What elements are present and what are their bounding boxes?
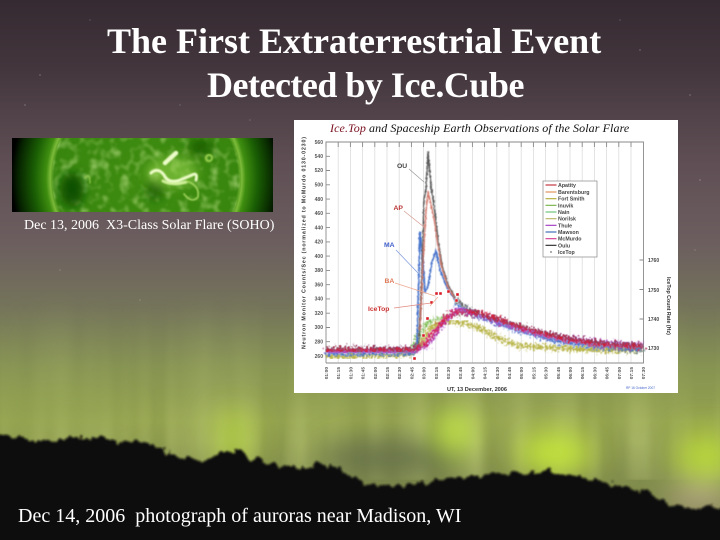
right axis labels: icetop count rate: 1740 bbox=[648, 317, 659, 323]
callout: IceTop bbox=[368, 303, 431, 313]
title: Detected by Ice.Cube bbox=[207, 64, 524, 104]
icetop series bbox=[326, 311, 643, 350]
callout: MA: MA bbox=[384, 242, 395, 249]
plot axes bbox=[326, 142, 644, 363]
x axis labels: time: 03:15 bbox=[434, 367, 440, 379]
x axis labels: time: 02:45 bbox=[409, 367, 415, 379]
credit: RP 16 October 2007 bbox=[626, 386, 655, 390]
x axis labels: time: 03:30 bbox=[446, 367, 452, 379]
legend: Fort Smith bbox=[558, 197, 584, 203]
y axis labels: neutron monitor counts: 400 bbox=[315, 254, 323, 260]
y axis labels: neutron monitor counts: 420 bbox=[315, 240, 323, 246]
callout: AP bbox=[394, 205, 424, 227]
chart title: Ice.Top and Spaceship Earth Observations of the Solar Flare bbox=[329, 121, 630, 135]
x axis labels: time: 05:00 bbox=[519, 367, 525, 379]
callouts bbox=[368, 163, 438, 313]
plot grid bbox=[338, 142, 631, 363]
blue series tail bbox=[326, 303, 643, 354]
callout: OU bbox=[397, 163, 424, 182]
y axis labels: neutron monitor counts: 480 bbox=[315, 197, 323, 203]
legend: Nain bbox=[558, 210, 569, 216]
caption: aurora photo: Dec 14, 2006 photograph of auroras near Madison, WI bbox=[18, 505, 461, 527]
data lines bbox=[326, 152, 643, 357]
x axis labels: time: 02:15 bbox=[385, 367, 391, 379]
x axis labels: time: 04:15 bbox=[483, 367, 489, 379]
solar flare image bbox=[12, 138, 273, 212]
x axis labels: time: 07:30 bbox=[641, 367, 647, 379]
callout: IceTop: IceTop bbox=[368, 306, 389, 313]
x axis labels: time: 03:45 bbox=[458, 367, 464, 379]
x axis labels: time: 02:30 bbox=[397, 367, 403, 379]
y axis labels: neutron monitor counts: 300 bbox=[315, 325, 323, 331]
legend: IceTop bbox=[558, 250, 575, 256]
oulu series tail bbox=[326, 298, 643, 349]
legend bbox=[543, 181, 597, 257]
y axis labels: neutron monitor counts: 500 bbox=[315, 182, 323, 188]
y axis labels: neutron monitor counts: 340 bbox=[315, 296, 323, 302]
callout: AP: AP bbox=[394, 205, 403, 212]
legend: Oulu bbox=[558, 243, 570, 249]
right axis labels: icetop count rate: 1730 bbox=[648, 346, 659, 352]
y axis labels: neutron monitor counts: 360 bbox=[315, 282, 323, 288]
callout: BA bbox=[384, 278, 438, 306]
y axis labels: neutron monitor counts: 440 bbox=[315, 226, 323, 232]
icetop early markers bbox=[413, 290, 459, 360]
y axis labels: neutron monitor counts: 380 bbox=[315, 268, 323, 274]
x axis labels: time: 05:30 bbox=[544, 367, 550, 379]
legend: Norilsk bbox=[558, 217, 576, 223]
y axis labels: neutron monitor counts: 460 bbox=[315, 211, 323, 217]
y axis labels: neutron monitor counts: 560 bbox=[315, 140, 323, 146]
right axis labels: icetop count rate: 1750 bbox=[648, 288, 659, 294]
title: The First Extraterrestrial Event bbox=[107, 21, 601, 61]
legend: Mawson bbox=[558, 230, 579, 236]
x axis labels: time: 05:15 bbox=[531, 367, 537, 379]
x axis labels: time: 04:00 bbox=[470, 367, 476, 379]
x axis labels: time: 01:15 bbox=[336, 367, 342, 379]
x axis labels: time: 04:30 bbox=[495, 367, 501, 379]
legend: Thule bbox=[558, 223, 572, 229]
x axis labels: time: 04:45 bbox=[507, 367, 513, 379]
legend: Barentsburg bbox=[558, 190, 590, 196]
y axis labels: neutron monitor counts: 260 bbox=[315, 354, 323, 360]
right axis labels: icetop count rate: 1760 bbox=[648, 258, 659, 264]
legend: Apatity bbox=[558, 183, 576, 189]
x axis labels: time: 06:00 bbox=[568, 367, 574, 379]
legend: Inuvik bbox=[558, 203, 573, 209]
legend: McMurdo bbox=[558, 237, 582, 243]
y axis labels: neutron monitor counts: 540 bbox=[315, 154, 323, 160]
x axis labels: time: 06:30 bbox=[592, 367, 598, 379]
y axis labels: neutron monitor counts: 280 bbox=[315, 340, 323, 346]
blue series peak: mawson bbox=[417, 232, 455, 345]
y axis labels: neutron monitor counts: 520 bbox=[315, 168, 323, 174]
x axis labels: time bbox=[324, 367, 647, 379]
right axis title: IceTop Count Rate (Hz) bbox=[665, 277, 671, 335]
callout: OU: OU bbox=[397, 163, 407, 170]
x axis labels: time: 01:30 bbox=[348, 367, 354, 379]
x axis labels: time: 05:45 bbox=[556, 367, 562, 379]
y axis labels: neutron monitor counts bbox=[315, 140, 323, 360]
x axis labels: time: 01:45 bbox=[361, 367, 367, 379]
stars bbox=[24, 20, 701, 300]
y axis title: Neutron Monitor Counts/Sec (normalized to McMurdo 0130-0230) bbox=[302, 137, 308, 349]
x axis labels: time: 03:00 bbox=[422, 367, 428, 379]
right axis labels: icetop count rate bbox=[648, 258, 659, 352]
x axis labels: time: 07:00 bbox=[617, 367, 623, 379]
green series bbox=[326, 312, 480, 351]
yellow series bbox=[326, 322, 643, 357]
apatity series peak bbox=[420, 191, 455, 330]
x axis labels: time: 07:15 bbox=[629, 367, 635, 379]
callout: MA bbox=[384, 242, 418, 273]
x axis labels: time: 06:15 bbox=[580, 367, 586, 379]
title bbox=[107, 21, 602, 104]
callout: BA: BA bbox=[384, 278, 394, 285]
y axis labels: neutron monitor counts: 320 bbox=[315, 311, 323, 317]
x axis labels: time: 06:45 bbox=[605, 367, 611, 379]
caption: solar flare: Dec 13, 2006 X3-Class Solar Flare (SOHO) bbox=[24, 218, 274, 233]
purple and magenta series bbox=[326, 310, 643, 351]
x axis labels: time: 02:00 bbox=[373, 367, 379, 379]
x axis title: UT, 13 December, 2006 bbox=[447, 387, 507, 393]
oulu series peak bbox=[419, 152, 455, 340]
x axis labels: time: 01:00 bbox=[324, 367, 330, 379]
